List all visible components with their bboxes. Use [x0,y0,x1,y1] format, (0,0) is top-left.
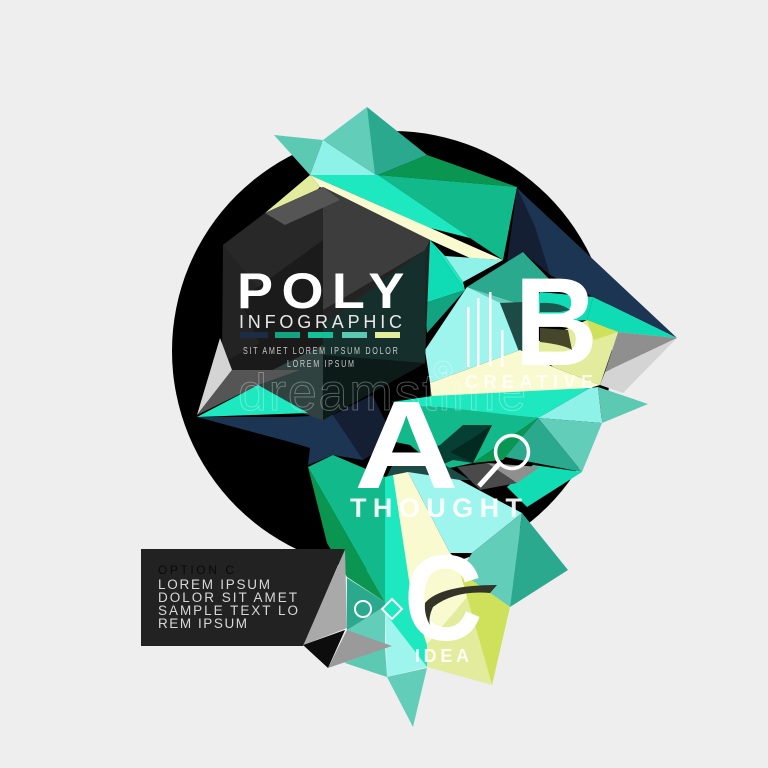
label: thought: THOUGHT [350,493,522,523]
letter B: B [515,253,598,392]
panel: option C: REM IPSUM [158,616,247,631]
subtitle text [243,345,398,369]
watermark: dreamstime [238,364,526,422]
colour bars [240,332,400,338]
letter A: A [354,374,459,515]
letter C: C [404,532,483,666]
subtitle text: LOREM IPSUM [287,358,354,369]
panel: option C: LOREM IPSUM [158,577,270,592]
heading: infographic: INFOGRAPHIC [239,312,402,332]
label: creative: CREATIVE [465,372,593,392]
label: idea: IDEA [415,646,469,666]
panel: option C [141,549,345,646]
panel: hexagon title backdrop [197,187,430,465]
panel: right navy and creative facets [385,188,677,507]
icon: magnifier [479,436,528,486]
panel: option C: OPTION C [158,563,234,577]
icon: diamond marker [382,599,402,619]
icon: circle marker [355,601,371,617]
top polygon cluster [265,107,517,333]
panel: lower polygon cluster [303,455,568,727]
heading: poly: POLY [237,264,404,320]
panel: option C: DOLOR SIT AMET [158,590,297,605]
icon: bar chart [467,292,504,367]
subtitle text: SIT AMET LOREM IPSUM DOLOR [243,345,398,356]
black circle [172,131,612,571]
panel: option C: SAMPLE TEXT LO [158,603,298,618]
